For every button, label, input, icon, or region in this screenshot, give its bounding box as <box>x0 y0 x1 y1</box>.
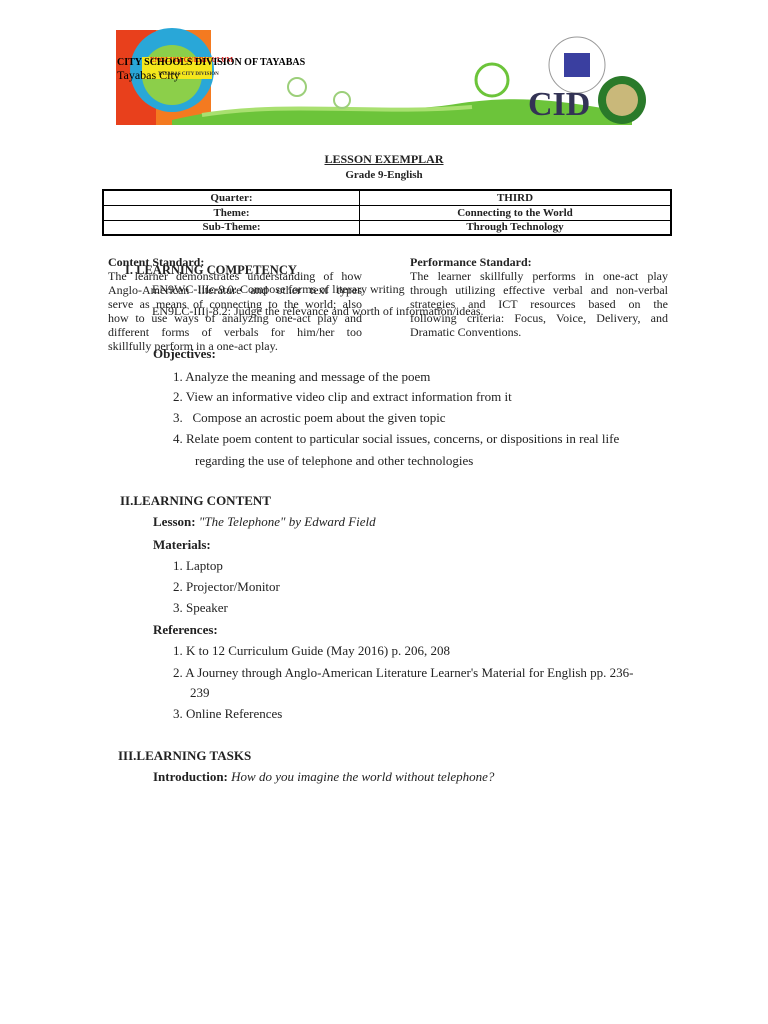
objectives: 4. Relate poem content to particular social issues, concerns, or dispositions in real life <box>173 431 619 446</box>
objectives: 1. Analyze the meaning and message of the poem <box>173 369 430 384</box>
text: following criteria: Focus, Voice, Delivery, and <box>410 311 668 325</box>
text: Tayabas City <box>117 68 180 82</box>
title: LESSON EXEMPLAR <box>324 152 444 166</box>
text: different forms of verbals for him/her too <box>108 325 362 339</box>
objectives: 3. Compose an acrostic poem about the given topic <box>173 410 446 425</box>
text: The learner demonstrates understanding of how <box>108 269 362 283</box>
info table: THIRD <box>497 192 533 204</box>
text: The learner skillfully performs in one-act play <box>410 269 668 283</box>
references: 3. Online References <box>173 706 282 721</box>
banner background: ENGLISH CURRICULUM <box>150 56 233 64</box>
objectives: regarding the use of telephone and other technologies <box>195 453 473 468</box>
lesson: Lesson: "The Telephone" by Edward Field <box>153 514 376 529</box>
banner background <box>112 25 668 127</box>
objectives <box>153 346 619 468</box>
header text: CITY SCHOOLS DIVISION OF TAYABAS <box>117 57 305 68</box>
objectives: 2. View an informative video clip and extract information from it <box>173 389 512 404</box>
materials: Materials: <box>153 537 211 552</box>
subtitle: Grade 9-English <box>345 169 423 181</box>
text: Anglo-American literature and other text types <box>108 283 362 297</box>
introduction: Introduction: How do you imagine the world without telephone? <box>153 769 494 784</box>
heading: learning content: II.LEARNING CONTENT <box>120 493 271 508</box>
text: how to use ways of analyzing one-act play and <box>108 311 362 325</box>
icon: DepEd seal <box>549 37 605 93</box>
materials: 3. Speaker <box>173 600 228 615</box>
references <box>153 622 633 721</box>
heading: learning tasks: III.LEARNING TASKS <box>118 748 251 763</box>
competency 2: EN9LC-IIIj-8.2: Judge the relevance and worth of information/ideas. <box>152 304 484 318</box>
references: References: <box>153 622 218 637</box>
materials: 1. Laptop <box>173 558 223 573</box>
references: 1. K to 12 Curriculum Guide (May 2016) p. 206, 208 <box>173 643 450 658</box>
content standard <box>108 255 362 353</box>
competency 1: EN9WC-IIIc-9.0: Compose forms of literary writing <box>152 282 405 296</box>
text: skillfully perform in a one-act play. <box>108 339 278 353</box>
info table <box>102 189 672 236</box>
icon: CID logo: CID <box>528 86 590 123</box>
references: 239 <box>190 685 210 700</box>
text: Performance Standard: <box>410 255 532 269</box>
header banner <box>116 28 646 125</box>
info table: Connecting to the World <box>457 206 573 218</box>
materials: 2. Projector/Monitor <box>173 579 280 594</box>
text: Dramatic Conventions. <box>410 325 521 339</box>
text: strategies and ICT resources based on the <box>410 297 668 311</box>
info table: Theme: <box>213 206 250 218</box>
banner background: TAYABAS CITY DIVISION <box>158 72 219 77</box>
info table: Sub-Theme: <box>202 221 261 233</box>
info table: Through Technology <box>466 221 564 233</box>
heading: learning competency: I. LEARNING COMPETENCY <box>125 263 297 277</box>
info table: Quarter: <box>210 192 253 204</box>
icon: Tayabas division seal <box>598 76 646 124</box>
performance standard <box>410 255 668 339</box>
text: Content Standard: <box>108 255 204 269</box>
text: through utilizing effective verbal and non-verbal <box>410 283 668 297</box>
text: serve as means of connecting to the world; also <box>108 297 362 311</box>
materials <box>153 537 280 615</box>
references: 2. A Journey through Anglo-American Literature Learner's Material for English pp. 236- <box>173 665 633 680</box>
objectives: Objectives: <box>153 346 216 361</box>
